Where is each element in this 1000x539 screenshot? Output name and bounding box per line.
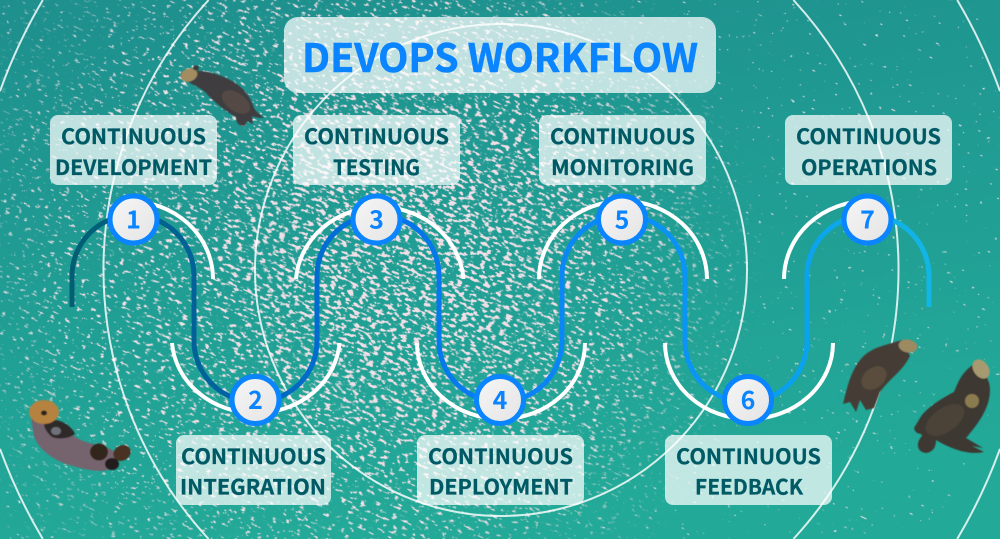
step 3: continuous testing: 3 xyxy=(369,200,384,236)
step 1: continuous development: CONTINUOUS xyxy=(61,121,206,151)
step 6: continuous feedback xyxy=(665,376,832,505)
step 7: continuous operations: OPERATIONS xyxy=(801,152,937,182)
step 7: continuous operations xyxy=(785,115,952,243)
step 4: continuous deployment: CONTINUOUS xyxy=(428,441,573,471)
step 1: continuous development: 1 xyxy=(126,200,141,236)
step 5: continuous monitoring: MONITORING xyxy=(551,152,694,182)
step 2: continuous integration: INTEGRATION xyxy=(180,472,326,502)
step 2: continuous integration: CONTINUOUS xyxy=(181,441,326,471)
white arcs xyxy=(129,201,868,419)
otter: right lower xyxy=(914,356,993,453)
step 3: continuous testing xyxy=(293,115,460,243)
step 2: continuous integration xyxy=(176,376,331,505)
step 1: continuous development xyxy=(50,115,217,243)
step 4: continuous deployment: 4 xyxy=(493,381,508,417)
step 5: continuous monitoring: 5 xyxy=(615,200,629,236)
otter: right upper xyxy=(843,338,918,412)
step 5: continuous monitoring xyxy=(539,115,706,243)
step 4: continuous deployment xyxy=(417,376,584,505)
step 7: continuous operations: 7 xyxy=(860,200,875,236)
title: DEVOPS WORKFLOW xyxy=(302,28,698,84)
step 4: continuous deployment: DEPLOYMENT xyxy=(429,472,573,502)
step 6: continuous feedback: 6 xyxy=(741,381,755,417)
step 1: continuous development: DEVELOPMENT xyxy=(55,152,212,182)
step 6: continuous feedback: CONTINUOUS xyxy=(676,441,821,471)
step 2: continuous integration: 2 xyxy=(248,381,263,417)
otter: top left xyxy=(179,66,264,126)
step 7: continuous operations: CONTINUOUS xyxy=(796,121,941,151)
step 5: continuous monitoring: CONTINUOUS xyxy=(550,121,695,151)
title panel xyxy=(284,17,716,93)
step 6: continuous feedback: FEEDBACK xyxy=(695,472,804,502)
step 3: continuous testing: TESTING xyxy=(333,152,420,182)
otter: bottom left xyxy=(29,400,134,471)
workflow path xyxy=(72,215,929,402)
step 3: continuous testing: CONTINUOUS xyxy=(304,121,449,151)
